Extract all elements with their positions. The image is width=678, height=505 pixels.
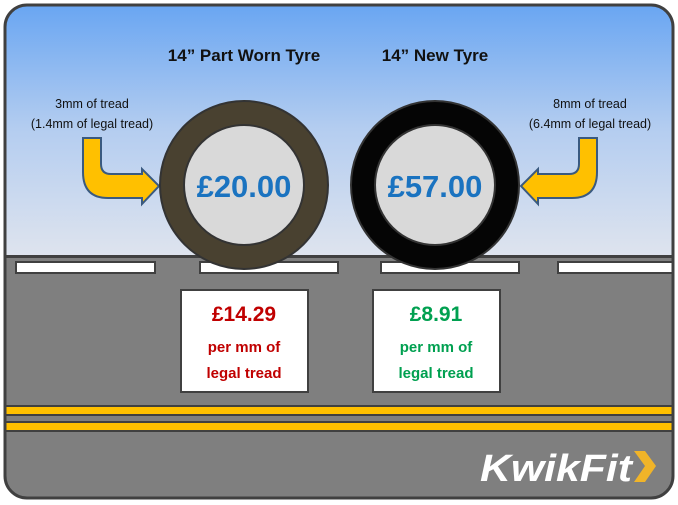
tyre: part worn: £20.00 xyxy=(197,169,291,204)
text: new tread: 8mm of tread xyxy=(553,97,627,111)
box: part worn cost xyxy=(181,290,308,392)
title: new tyre: 14” New Tyre xyxy=(382,46,488,65)
text: new tread: (6.4mm of legal tread) xyxy=(529,117,651,131)
arrow: left xyxy=(83,138,159,204)
box: new cost: legal tread xyxy=(398,365,474,382)
text: part worn tread: 3mm of tread xyxy=(55,97,129,111)
tyre: new: £57.00 xyxy=(388,169,482,204)
logo: KwikFit: KwikFit xyxy=(480,448,634,490)
box: part worn cost: legal tread xyxy=(206,365,282,382)
arrow: right xyxy=(521,138,597,204)
title: part worn tyre: 14” Part Worn Tyre xyxy=(168,46,320,65)
box: new cost: per mm of xyxy=(400,339,473,356)
box: new cost xyxy=(373,290,500,392)
box: new cost: £8.91 xyxy=(410,303,463,326)
box: part worn cost: per mm of xyxy=(208,339,281,356)
tyre: part worn xyxy=(160,101,328,269)
text: part worn tread: (1.4mm of legal tread) xyxy=(31,117,153,131)
tyre: new xyxy=(351,101,519,269)
box: part worn cost: £14.29 xyxy=(212,303,276,326)
